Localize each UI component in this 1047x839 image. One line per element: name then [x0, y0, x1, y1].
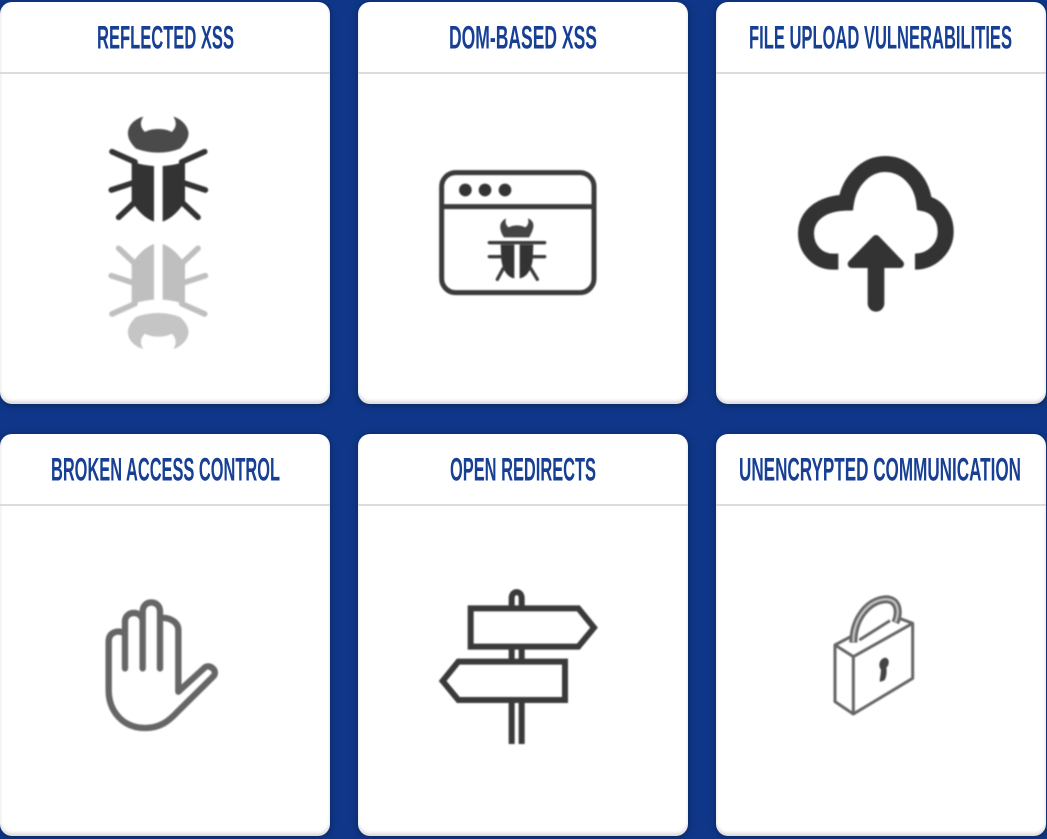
icon: bug with mirrored reflection — [108, 116, 210, 350]
panel: open redirects — [358, 434, 688, 836]
icon: cloud upload — [797, 155, 955, 313]
icon: padlock — [832, 594, 916, 716]
panel: broken access control — [0, 434, 330, 836]
heading: file upload vulnerabilities — [716, 2, 1046, 74]
heading: broken access control — [0, 434, 330, 506]
heading: DOM-based XSS — [358, 2, 688, 74]
panel: DOM-based XSS — [358, 2, 688, 404]
icon: browser window with bug — [438, 169, 598, 296]
icon: raised hand — [104, 598, 219, 732]
panel: file upload vulnerabilities — [716, 2, 1046, 404]
heading: reflected XSS — [0, 2, 330, 74]
icon: signpost — [438, 588, 598, 745]
heading: open redirects — [358, 434, 688, 506]
panel: reflected XSS — [0, 2, 330, 404]
panel: unencrypted communication — [716, 434, 1046, 836]
heading: unencrypted communication — [716, 434, 1046, 506]
